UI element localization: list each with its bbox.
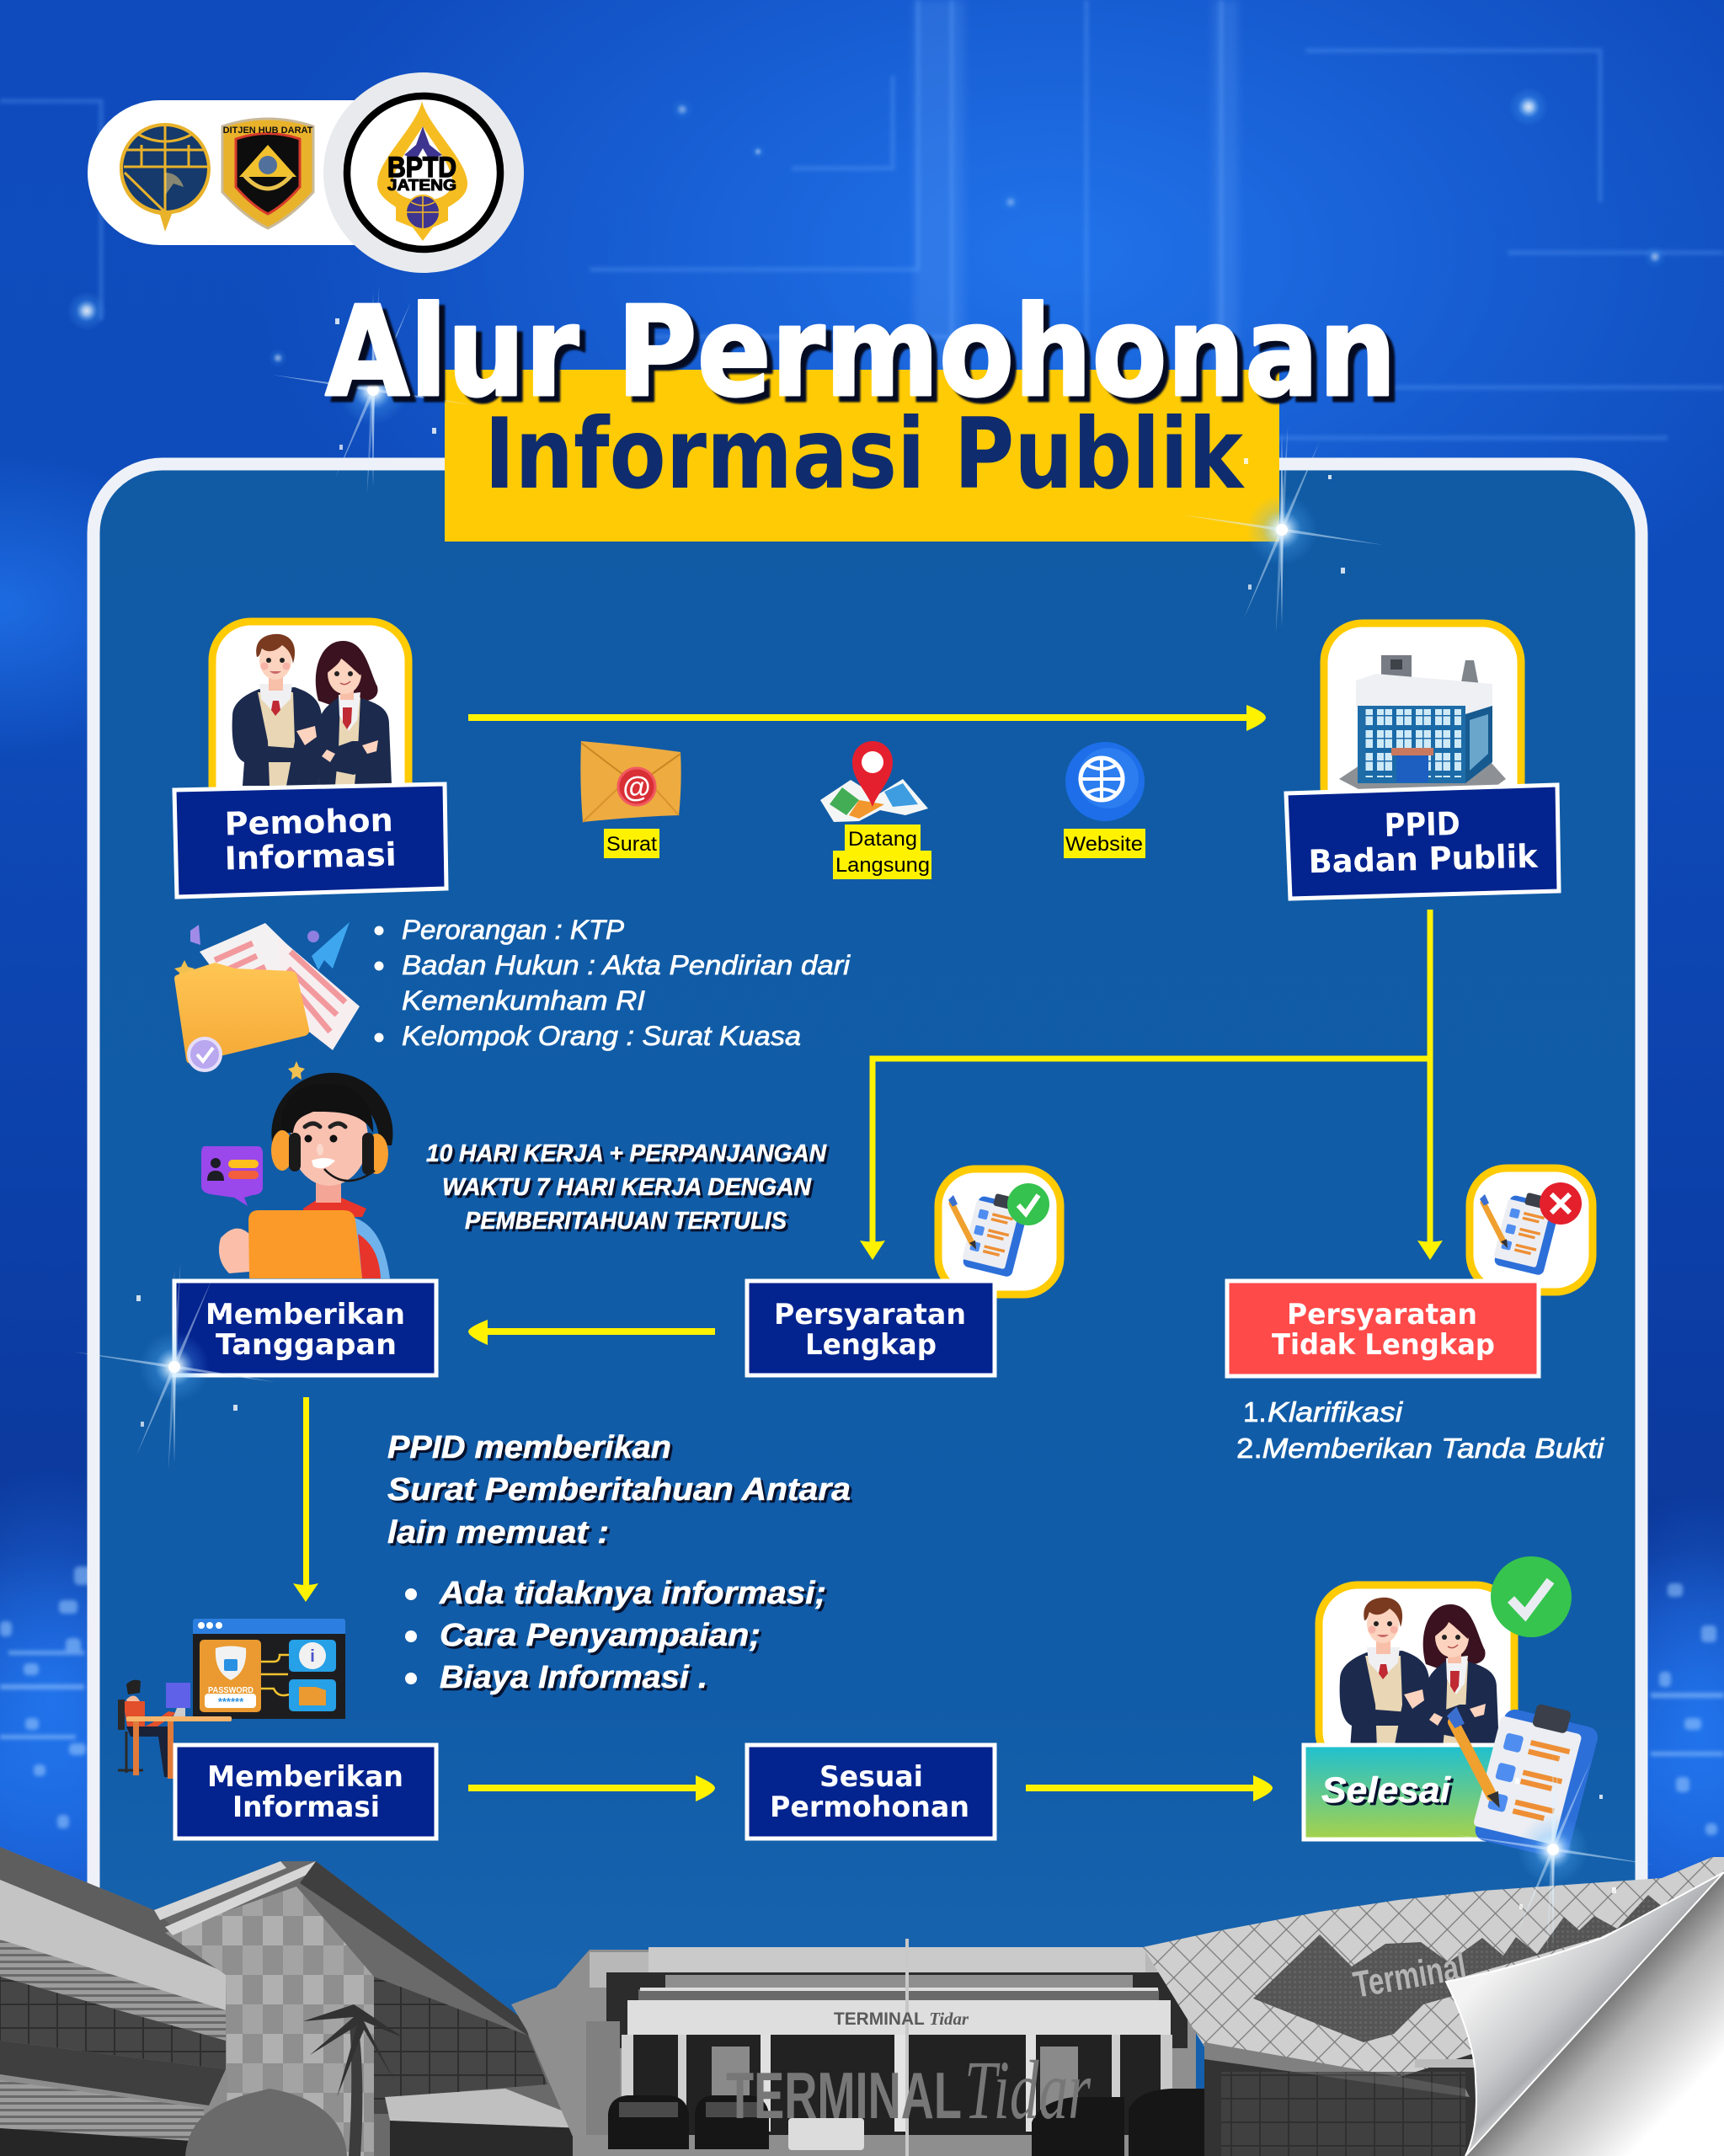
text: PPID notification [387,1430,851,1550]
logo: Ditjen Hub Darat badge: DITJEN HUB DARAT [223,125,313,136]
logo: BPTD Jateng roundel: JATENG [387,177,456,194]
list: applicant documents [374,915,851,1051]
illustration: two applicants [232,634,392,786]
box: Sesuai Permohonan: Permohonan [770,1790,969,1824]
label: Website: Website [1065,833,1143,856]
box: Memberikan Tanggapan [174,1281,436,1375]
card: clipboard with green check [938,1169,1060,1294]
icon: office building [1339,655,1506,790]
label: Datang Langsung: Langsung [835,854,930,877]
box: Persyaratan Tidak Lengkap: Persyaratan [1287,1298,1477,1331]
vehicles [608,2089,1221,2156]
box: Memberikan Informasi: Informasi [232,1790,380,1824]
list: incomplete actions: 2.Memberikan Tanda Bukti [1236,1433,1605,1464]
icon: password security window [193,1619,345,1719]
building: terminal centre: Tidar [964,2043,1092,2137]
icon: Surat envelope: @ [622,771,651,803]
icon: Surat envelope [580,741,681,822]
box: Memberikan Tanggapan: Tanggapan [216,1328,397,1362]
card: Selesai [1304,1556,1603,1860]
label: Pemohon Informasi: Informasi [224,836,397,877]
text: response deadline: WAKTU 7 HARI KERJA DENGAN [442,1174,812,1201]
icon: password security window: ****** [218,1695,244,1708]
text: PPID notification: lain memuat : [387,1515,609,1550]
card: Pemohon Informasi [174,622,446,897]
text: response deadline [426,1140,827,1235]
list: notification contents [405,1576,826,1695]
logo strip: white pill [88,72,524,273]
title line 2: Informasi Publik [484,398,1245,511]
building: tower with pointed roof [154,1861,590,2156]
icon: large green check [1491,1556,1572,1637]
box: Persyaratan Lengkap: Persyaratan [774,1298,966,1331]
title banner: yellow box [445,370,1279,542]
logo: Ditjen Hub Darat badge [222,119,313,228]
box: Sesuai Permohonan [747,1745,995,1838]
label: Selesai [1304,1745,1506,1839]
decoration: palm tree and shrub [185,2004,404,2156]
icon: website globe [1065,742,1145,821]
building: right diamond facade: Terminal [1350,1945,1470,2006]
icon: red cross [1540,1182,1582,1225]
list: applicant documents: Kelompok Orang : Surat Kuasa [402,1021,801,1051]
text: PPID notification: Surat Pemberitahuan Antara [387,1472,851,1508]
list: incomplete actions [1236,1396,1605,1464]
list: notification contents: Ada tidaknya informasi; [439,1576,826,1611]
arrow: Informasi to Sesuai [468,1775,715,1801]
box: Persyaratan Lengkap: Lengkap [805,1328,937,1362]
text: response deadline: 10 HARI KERJA + PERPANJANGAN [426,1140,827,1167]
building: right diamond facade [1143,1857,1724,2156]
list: incomplete actions: 1. [1243,1396,1267,1428]
label: Pemohon Informasi [174,784,446,897]
sign: terminal small: TERMINAL Tidar [834,2009,969,2029]
label: PPID Badan Publik: PPID [1384,805,1460,844]
label: PPID Badan Publik [1286,785,1559,899]
box: Memberikan Informasi [175,1745,436,1838]
sign: terminal large: TERMINAL [726,2058,962,2132]
icon: folder with documents [174,922,360,1080]
arrow: Tanggapan to Memberikan Informasi [293,1397,318,1602]
arrow: Sesuai to Selesai [1026,1775,1273,1801]
label: Selesai: Selesai [1321,1770,1451,1811]
label: Datang Langsung [833,825,931,879]
box: Sesuai Permohonan: Sesuai [819,1760,923,1794]
title line 1: Alur Permohonan [325,280,1396,424]
icon: large clipboard [1447,1696,1603,1860]
icon: clipboard [948,1189,1030,1278]
list: incomplete actions: Klarifikasi [1268,1396,1404,1428]
icon: location map [820,741,928,822]
label: Pemohon Informasi: Pemohon [224,802,393,842]
list: applicant documents: Kemenkumham RI [402,985,645,1016]
sparkle: bottom right [1449,1745,1657,1954]
building: terminal centre [511,1939,1221,2156]
card: clipboard with red cross [1470,1168,1593,1292]
arrows: PPID split to both outcomes [860,910,1443,1260]
icon: person at desk [118,1680,232,1779]
main panel [93,464,1641,2156]
label: Website [1064,829,1145,858]
building: left wing [0,1847,232,2156]
illustration: call-centre agent [201,1073,392,1278]
box: Memberikan Informasi: Memberikan [207,1760,403,1794]
logo: Kemenhub globe emblem [120,123,211,232]
sparkle: banner right [1178,425,1385,634]
box: Persyaratan Tidak Lengkap: Tidak Lengkap [1272,1328,1495,1362]
arrow: Lengkap to Tanggapan [468,1320,715,1345]
text: response deadline: PEMBERITAHUAN TERTULIS [465,1208,787,1235]
box: Persyaratan Tidak Lengkap [1227,1281,1539,1376]
bottom buildings: monochrome terminal [0,1847,1724,2156]
arrow: Pemohon to PPID [468,705,1266,731]
box: Memberikan Tanggapan: Memberikan [205,1298,405,1331]
logo: BPTD Jateng roundel: BPTD [387,152,456,184]
illustration: finished applicants [1340,1598,1499,1749]
label: PPID Badan Publik: Badan Publik [1308,838,1539,880]
icon: clipboard incomplete [1480,1188,1561,1276]
box: Persyaratan Lengkap [747,1281,995,1375]
label: Surat: Surat [606,833,657,856]
icon: password security window: i [310,1647,315,1666]
label: Surat [604,829,659,858]
label: Datang Langsung: Datang [848,828,917,851]
list: applicant documents: Perorangan : KTP [402,915,625,945]
list: notification contents: Cara Penyampaian; [440,1618,761,1653]
sparkle: title left [270,286,477,494]
icon: password security window: PASSWORD [208,1686,254,1695]
sparkle: box left [71,1262,278,1471]
card: PPID Badan Publik [1286,623,1559,899]
page curl corner [1446,1870,1724,2156]
list: notification contents: Biaya Informasi . [440,1660,707,1695]
text: PPID notification: PPID memberikan [387,1430,671,1465]
logo: BPTD Jateng roundel [323,72,524,273]
icon: green check [1007,1183,1049,1225]
list: applicant documents: Badan Hukun : Akta Pendirian dari [402,950,851,980]
